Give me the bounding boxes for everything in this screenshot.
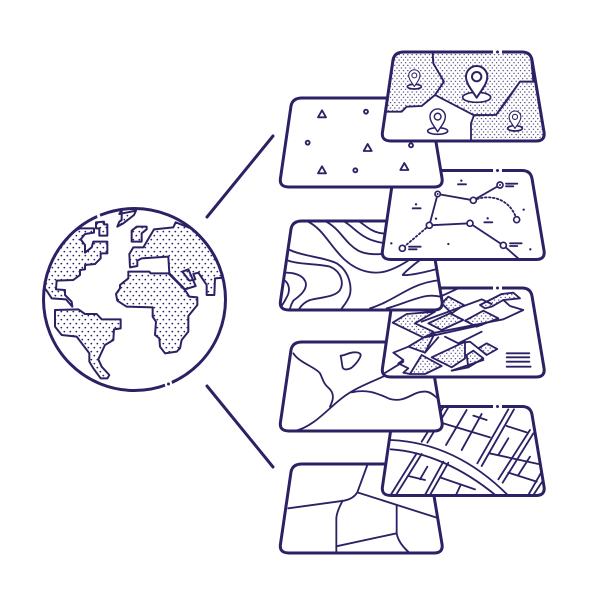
legend lines — [507, 353, 531, 367]
panel: network route layer — [382, 169, 544, 260]
labels and points — [409, 184, 522, 249]
globe — [37, 208, 237, 390]
isometric blocks — [382, 288, 523, 375]
panel: terrain regions layer — [280, 342, 442, 431]
arrow: upper connector — [207, 136, 273, 217]
panel: parcels layer — [280, 464, 442, 553]
panel: street map layer — [382, 405, 544, 497]
panel: isometric city layer — [382, 286, 544, 377]
continents — [45, 210, 222, 380]
panel: contour map layer — [280, 221, 443, 310]
panel: location pins layer — [380, 50, 546, 142]
dotted regions — [386, 54, 543, 140]
arrow: lower connector — [207, 386, 273, 467]
map pins — [407, 66, 522, 134]
panel: scattered points layer — [280, 98, 442, 187]
route nodes — [399, 182, 520, 251]
